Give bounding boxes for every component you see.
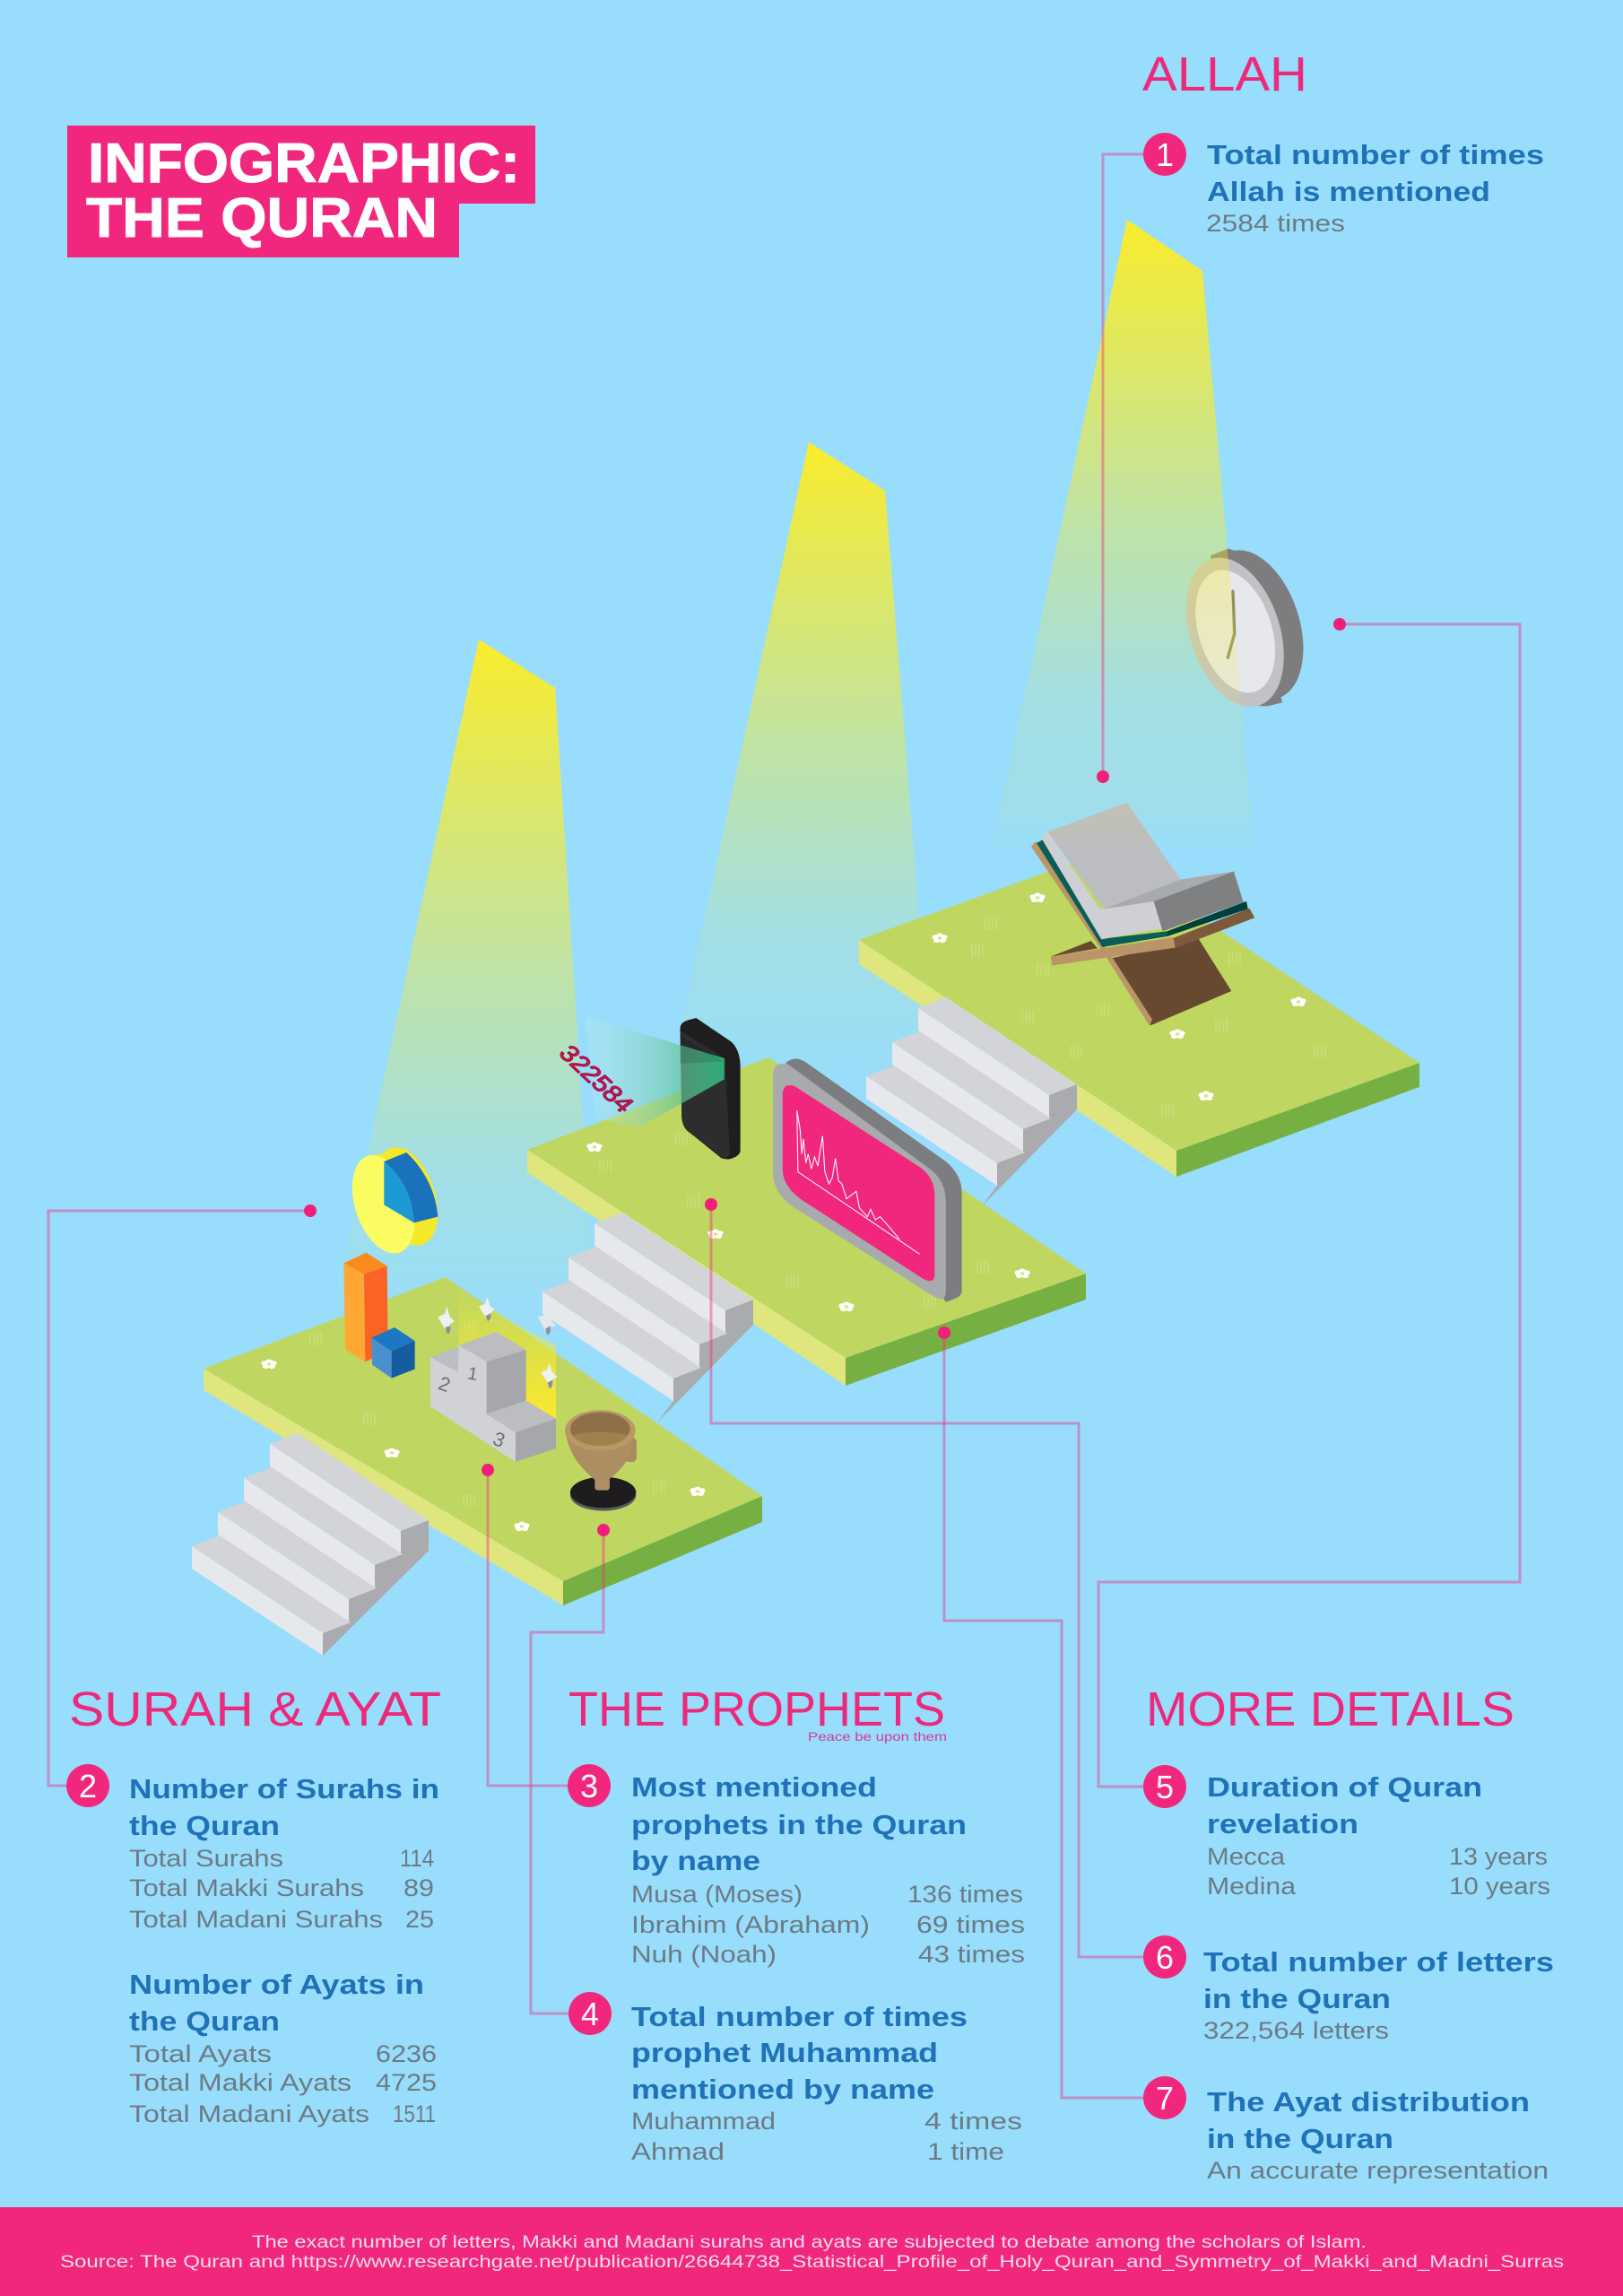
panel: Surah and Ayat — [66, 1683, 441, 2127]
item 4: 4 times — [924, 2108, 1022, 2135]
icon: phone projecting number — [586, 1016, 741, 1160]
item 2: Total Surahs — [129, 1845, 283, 1872]
item 2: Number of Ayats in — [129, 1969, 424, 2000]
item 5: 10 years — [1449, 1873, 1550, 1900]
light beam: lower — [330, 639, 596, 1327]
item 6 — [1143, 1935, 1554, 2044]
title: THE QURAN — [86, 187, 438, 249]
item 7 — [1143, 2076, 1549, 2184]
item 5: 5 — [1156, 1769, 1174, 1805]
item 3: by name — [631, 1845, 760, 1876]
item 6: 6 — [1156, 1939, 1174, 1976]
number: 322584: 322584 — [553, 1040, 640, 1117]
icon: pie chart — [341, 1139, 449, 1261]
item 7: 7 — [1156, 2080, 1174, 2117]
icons: charts, podium and trophy on lower platform — [341, 1139, 637, 1511]
item 2: 6236 — [376, 2040, 437, 2067]
heading: The Prophets: THE PROPHETS — [568, 1683, 945, 1736]
item 4 — [568, 1992, 1022, 2165]
item 1: Allah is mentioned — [1207, 176, 1490, 207]
item 6: Total number of letters — [1203, 1946, 1554, 1978]
item 4: Ahmad — [631, 2138, 725, 2165]
connector lines — [48, 154, 1520, 2098]
platform: middle — [527, 1057, 1086, 1386]
item 3: Nuh (Noah) — [631, 1941, 777, 1968]
title: INFOGRAPHIC: — [88, 133, 520, 195]
icon: podium: 2 — [436, 1372, 454, 1396]
item 6: in the Quran — [1203, 1983, 1391, 2014]
item 3 — [568, 1764, 1025, 1968]
item 3: 43 times — [918, 1941, 1025, 1968]
footer: The exact number of letters, Makki and Madani surahs and ayats are subjected to debate among the scholars of Islam. — [252, 2233, 1367, 2252]
item 3: 69 times — [916, 1911, 1025, 1938]
footer — [0, 2207, 1623, 2296]
item 3: Most mentioned — [631, 1771, 877, 1803]
panel: More Details — [1143, 1683, 1554, 2184]
item 5: Mecca — [1207, 1843, 1286, 1870]
item 2: Total Ayats — [129, 2040, 272, 2067]
heading: Surah and Ayat: SURAH & AYAT — [69, 1683, 441, 1736]
item 2: 1511 — [393, 2100, 436, 2127]
spotlight on podium — [459, 1292, 556, 1420]
stairs: bottom — [192, 1433, 429, 1656]
item 4: prophet Muhammad — [631, 2037, 938, 2068]
item 2: Number of Surahs in — [129, 1773, 439, 1805]
light beam: top (over clock and book) — [991, 220, 1254, 852]
item 2: Total Makki Ayats — [129, 2069, 352, 2096]
icon: podium: 3 — [490, 1427, 508, 1452]
platform: top — [859, 852, 1419, 1177]
item 4: 4 — [581, 1996, 599, 2032]
item 5: Duration of Quran — [1207, 1771, 1482, 1803]
icons: stars — [438, 1298, 558, 1388]
panel: Allah — [1142, 48, 1544, 237]
item 1: 1 — [1156, 136, 1174, 173]
item 4: Total number of times — [631, 2001, 968, 2032]
item 2: Total Madani Ayats — [129, 2100, 369, 2127]
heading: More Details: MORE DETAILS — [1146, 1683, 1515, 1736]
item 7: in the Quran — [1207, 2123, 1393, 2154]
icon: trophy — [565, 1410, 637, 1511]
item 3: prophets in the Quran — [631, 1809, 967, 1840]
footer: Source: The Quran and https://www.researchgate.net/publication/26644738_Statistical_Profile_of_Holy_Quran_and_Symmetry_of_Makki_and_Madni_Surras — [60, 2253, 1564, 2272]
item 4: Muhammad — [631, 2108, 776, 2135]
item 5 — [1143, 1765, 1550, 1900]
icon: wall clock — [1168, 537, 1321, 719]
item 1: 2584 times — [1206, 210, 1345, 237]
item 2 — [66, 1764, 439, 2127]
item 2: 25 — [405, 1906, 434, 1933]
item 2: 114 — [400, 1845, 434, 1872]
item 2: Total Madani Surahs — [129, 1906, 383, 1933]
icon: blue cube — [371, 1327, 415, 1378]
icon: podium — [430, 1332, 556, 1462]
item 5: revelation — [1207, 1808, 1358, 1839]
panel: The Prophets — [568, 1683, 1025, 2165]
item 4: mentioned by name — [631, 2074, 934, 2105]
icon: podium: 1 — [466, 1364, 480, 1385]
item 1: Total number of times — [1207, 139, 1544, 170]
item 7: An accurate representation — [1207, 2157, 1549, 2184]
item 3: Musa (Moses) — [631, 1881, 803, 1908]
icon: open book on stand — [1031, 803, 1254, 1026]
item 7: The Ayat distribution — [1207, 2086, 1530, 2118]
item 2: the Quran — [129, 2005, 280, 2037]
item 2: 89 — [404, 1874, 434, 1901]
stairs: top — [866, 997, 1077, 1207]
icon: orange bar — [343, 1253, 388, 1361]
note: peace be upon them: Peace be upon them — [808, 1729, 947, 1744]
item 5: Medina — [1207, 1873, 1297, 1900]
item 3: Ibrahim (Abraham) — [631, 1911, 870, 1938]
item 4: 1 time — [927, 2138, 1004, 2165]
platform: bottom — [204, 1277, 762, 1605]
light beam: middle — [668, 442, 933, 1085]
item 2: the Quran — [129, 1810, 280, 1841]
heading: Allah: ALLAH — [1142, 48, 1307, 101]
item 5: 13 years — [1449, 1843, 1548, 1870]
title — [67, 126, 535, 257]
item 2: 4725 — [376, 2069, 437, 2096]
item 3: 3 — [580, 1768, 598, 1805]
item 1 — [1143, 133, 1544, 237]
item 2: 2 — [79, 1768, 97, 1805]
item 2: Total Makki Surahs — [129, 1874, 364, 1901]
item 3: 136 times — [907, 1881, 1023, 1908]
stairs: middle — [542, 1213, 753, 1422]
item 6: 322,564 letters — [1203, 2017, 1389, 2044]
chart: ayat distribution screen — [773, 1058, 962, 1302]
